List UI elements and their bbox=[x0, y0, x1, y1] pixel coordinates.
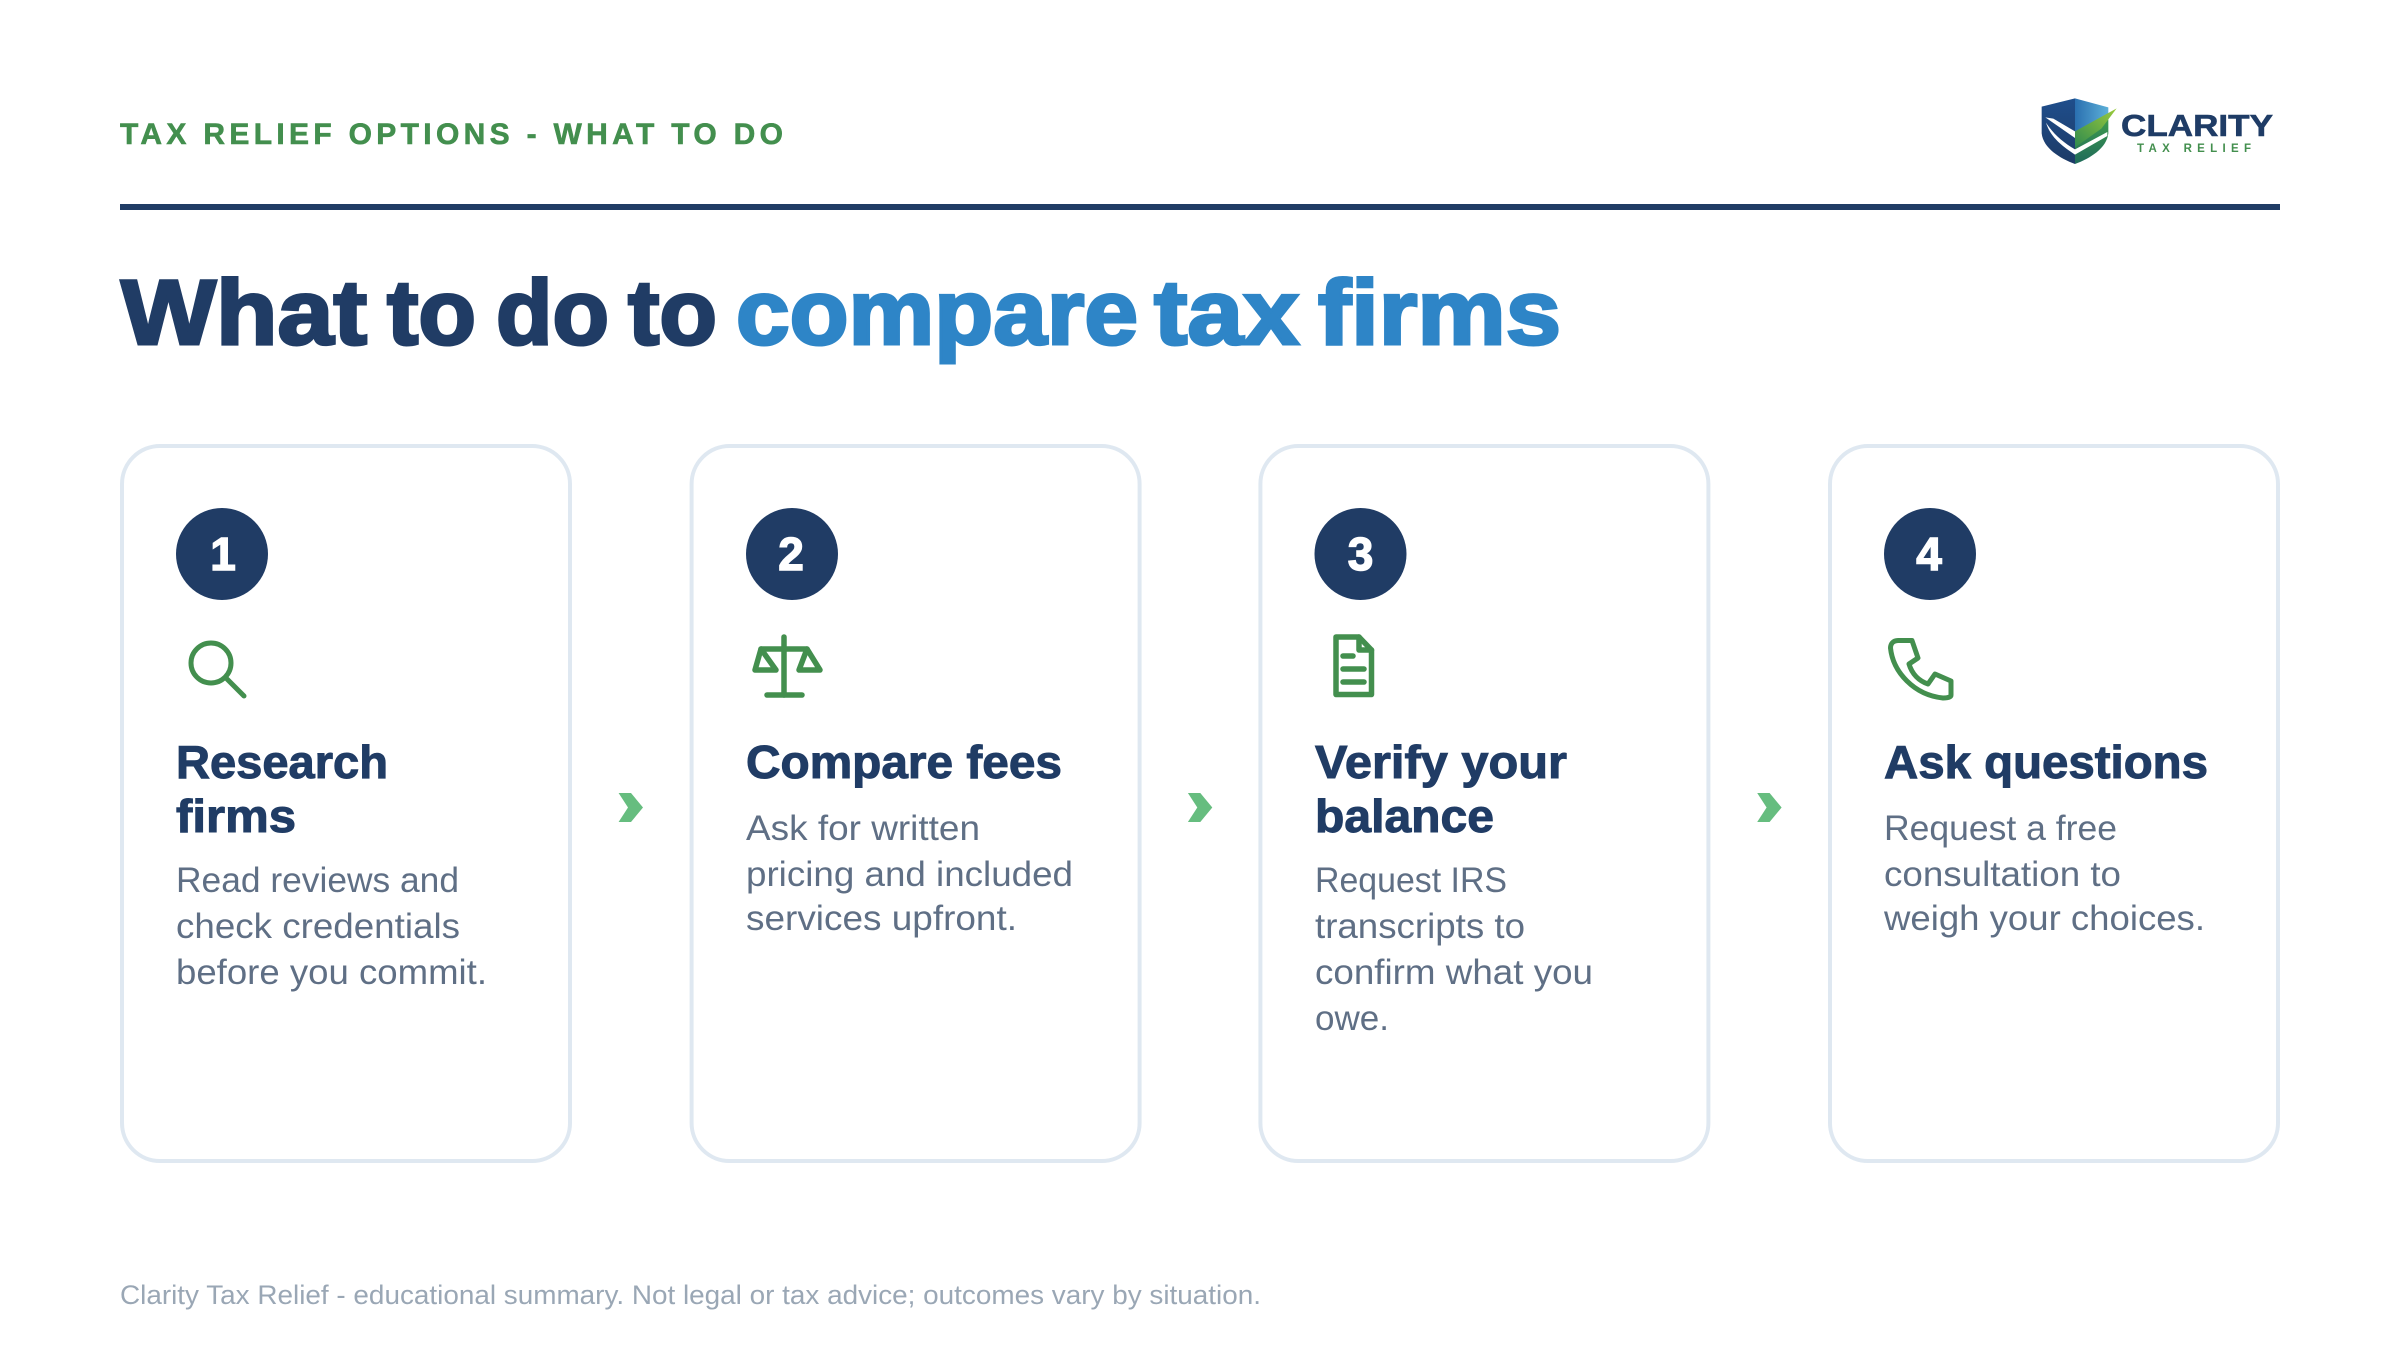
body text: Request a free bbox=[1884, 809, 2117, 848]
panel: step 3 verify your balance bbox=[1260, 446, 1708, 1161]
body text: Read reviews and bbox=[176, 861, 459, 900]
panel: step 1 research firms bbox=[122, 446, 570, 1161]
panel: step 4 ask questions bbox=[1830, 446, 2278, 1161]
body text: before you commit. bbox=[176, 953, 487, 992]
body text: confirm what you bbox=[1315, 953, 1593, 992]
panel: step 2 compare fees bbox=[692, 446, 1140, 1161]
arrow 1 bbox=[619, 793, 643, 822]
logo wordmark: CLARITY bbox=[2121, 108, 2273, 143]
heading: research firms bbox=[176, 736, 388, 842]
step number 4 bbox=[1884, 508, 1976, 600]
eyebrow heading: TAX RELIEF OPTIONS - WHAT TO DO bbox=[120, 118, 783, 151]
body text: pricing and included bbox=[746, 855, 1073, 894]
body text: services upfront. bbox=[746, 899, 1017, 938]
logo tagline: TAX RELIEF bbox=[2137, 143, 2251, 155]
title: do bbox=[496, 262, 609, 364]
step number 2: 2 bbox=[778, 528, 804, 580]
body text bbox=[176, 861, 487, 992]
heading: compare fees: Compare fees bbox=[746, 736, 1062, 788]
icon: phone bbox=[1890, 640, 1951, 698]
logo shield icon bbox=[2042, 98, 2117, 164]
body text bbox=[1315, 861, 1593, 1038]
body text: check credentials bbox=[176, 907, 460, 946]
title: to bbox=[387, 262, 476, 364]
heading: research firms: firms bbox=[176, 790, 296, 842]
title: firms bbox=[1318, 262, 1561, 364]
body text: transcripts to bbox=[1315, 907, 1525, 946]
title: What bbox=[121, 262, 367, 364]
step number 3 bbox=[1314, 508, 1406, 600]
step number 3: 3 bbox=[1348, 528, 1373, 580]
step number 2 bbox=[746, 508, 838, 600]
heading: verify your balance bbox=[1315, 736, 1567, 842]
heading: verify your balance: Verify your bbox=[1315, 736, 1567, 788]
heading: verify your balance: balance bbox=[1315, 790, 1494, 842]
title bbox=[121, 262, 1561, 364]
step number 1 bbox=[176, 508, 268, 600]
title: tax bbox=[1154, 262, 1299, 364]
icon: document bbox=[1336, 637, 1372, 694]
logo: Clarity Tax Relief bbox=[2042, 98, 2273, 164]
arrow 3 bbox=[1757, 793, 1782, 822]
step number 4: 4 bbox=[1916, 528, 1942, 580]
arrow 2 bbox=[1188, 793, 1212, 822]
header rule bbox=[120, 204, 2280, 210]
heading: ask questions: Ask questions bbox=[1884, 736, 2208, 788]
body text bbox=[746, 809, 1073, 938]
footer disclaimer: Clarity Tax Relief - educational summary. Not legal or tax advice; outcomes vary by situation. bbox=[120, 1280, 1261, 1310]
body text bbox=[1883, 809, 2205, 938]
icon: magnifying glass bbox=[191, 643, 244, 696]
body text: Ask for written bbox=[746, 809, 980, 848]
body text: owe. bbox=[1315, 999, 1389, 1038]
step number 1: 1 bbox=[210, 528, 236, 580]
body text: consultation to bbox=[1884, 855, 2121, 894]
body text: weigh your choices. bbox=[1883, 899, 2205, 938]
heading: research firms: Research bbox=[176, 736, 388, 788]
body text: Request IRS bbox=[1315, 861, 1507, 900]
title: to bbox=[628, 262, 717, 364]
icon: balance scale bbox=[755, 637, 820, 695]
title: compare bbox=[736, 262, 1138, 364]
